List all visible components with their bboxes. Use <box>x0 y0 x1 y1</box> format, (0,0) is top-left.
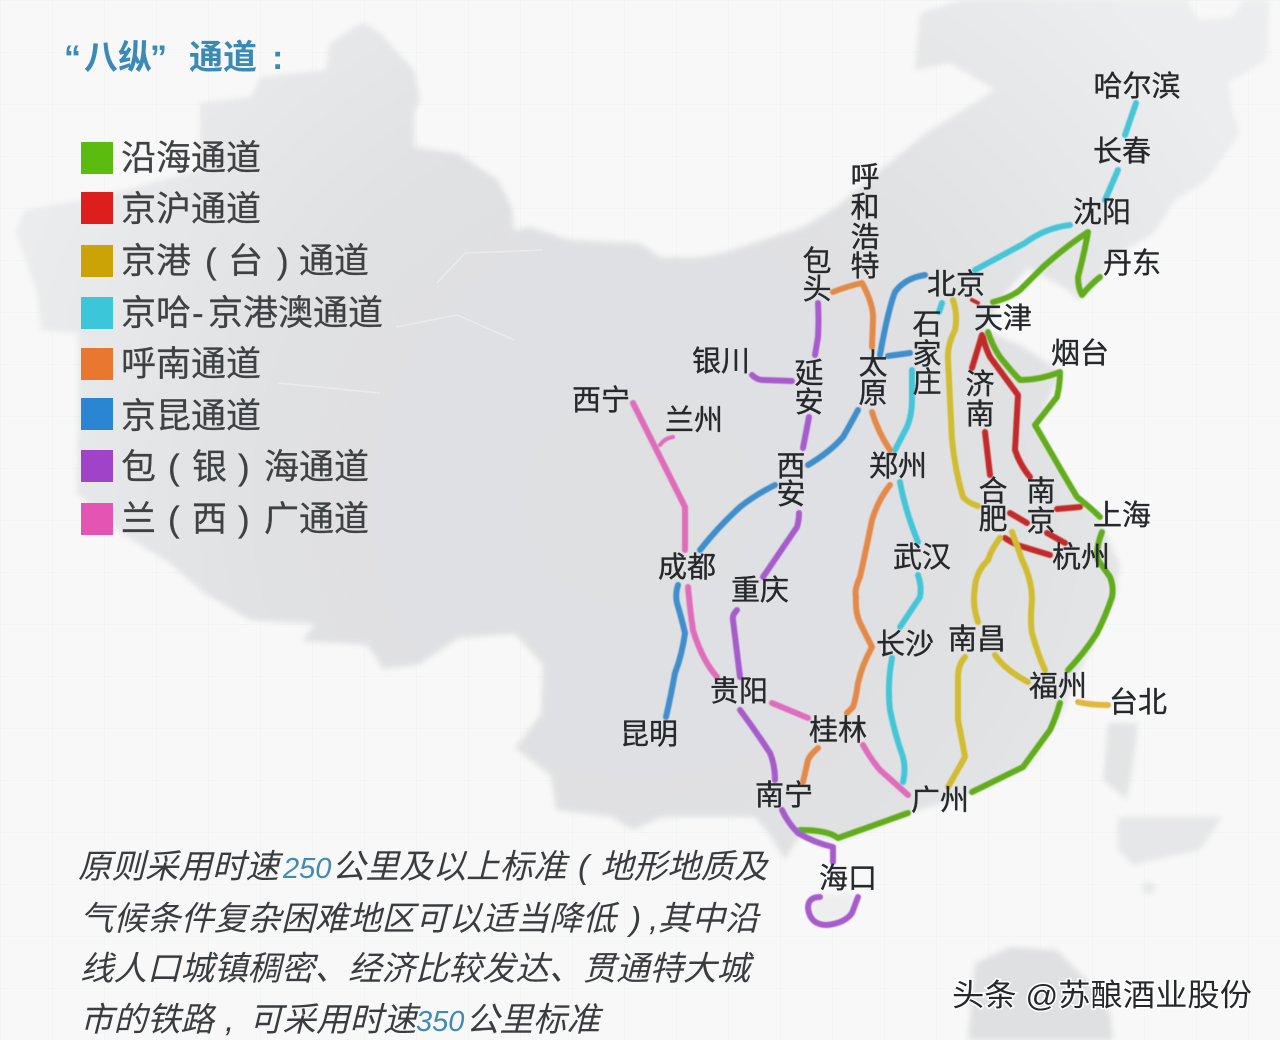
city: Hohhot: 和 <box>850 192 880 224</box>
city: Lanzhou: 兰州 <box>665 404 723 437</box>
city: Taipei: 台北 <box>1109 686 1167 719</box>
city: Hohhot: 呼 <box>850 162 880 194</box>
city: Guiyang: 贵阳 <box>710 675 768 708</box>
title: : <box>272 39 283 77</box>
city: Tianjin: 天津 <box>974 303 1032 335</box>
city: Nanning: 南宁 <box>755 779 813 812</box>
legend: Beijing-Hong Kong (Taiwan): ) <box>277 242 289 281</box>
city: Shanghai: 上海 <box>1093 499 1151 532</box>
legend: Beijing-Harbin: - <box>192 294 204 333</box>
city: Shijiazhuang: 庄 <box>912 366 942 399</box>
city: Xi'an: 安 <box>776 478 806 511</box>
legend: Lanzhou-Guangzhou: 广通道 <box>264 500 369 539</box>
city: Hangzhou: 杭州 <box>1052 541 1110 574</box>
legend: Beijing-Harbin <box>81 294 383 333</box>
city: Shijiazhuang: 家 <box>912 338 942 371</box>
legend: Hohhot-Nanning: 呼南通道 <box>121 345 261 384</box>
city: Fuzhou: 福州 <box>1029 670 1087 703</box>
legend: Beijing-Harbin: 京港澳通道 <box>208 294 383 333</box>
city: Shenyang: 沈阳 <box>1073 196 1131 229</box>
note text: , <box>649 901 658 938</box>
map: Hainan <box>808 892 855 925</box>
note text: 可采用时速 <box>249 1002 421 1039</box>
city: Guangzhou: 广州 <box>911 784 969 817</box>
legend: Baotou-Haikou <box>81 448 369 487</box>
city: Dandong: 丹东 <box>1103 247 1161 280</box>
note text: 地形地质及 <box>600 849 769 886</box>
city: Changchun: 长春 <box>1093 135 1151 168</box>
city: Zhengzhou: 郑州 <box>869 450 927 483</box>
city: Taiyuan: 太 <box>858 349 888 381</box>
route: Beijing-Hong Kong (Taiwan) <box>948 300 1108 787</box>
city: Xi'an: 西 <box>776 451 806 483</box>
city: Yantai: 烟台 <box>1051 337 1109 370</box>
legend: coastal: 沿海通道 <box>121 139 261 178</box>
note text: 原则采用时速 <box>78 849 283 886</box>
title: 通道 <box>189 39 257 77</box>
route: Baotou-Haikou <box>733 303 858 925</box>
city: Baotou: 头 <box>802 274 832 306</box>
legend: Beijing-Hong Kong (Taiwan): ( <box>205 242 217 281</box>
route: Hohhot-Nanning <box>803 283 890 782</box>
legend: Baotou-Haikou: ( <box>168 448 180 487</box>
city: Kunming: 昆明 <box>620 719 678 751</box>
legend: Baotou-Haikou: 包 <box>121 448 156 487</box>
legend: Beijing-Shanghai: 京沪通道 <box>121 190 261 229</box>
route: Beijing-Kunming <box>666 275 925 717</box>
legend: Beijing-Kunming: 京昆通道 <box>121 397 261 436</box>
city labels <box>572 70 1181 895</box>
city: Nanjing: 京 <box>1026 505 1056 538</box>
city: Chongqing: 重庆 <box>731 574 789 607</box>
title: 八纵 <box>84 39 152 77</box>
note text: 公里及以上标准 <box>332 849 570 886</box>
note text: 公里标准 <box>466 1002 603 1039</box>
city: Nanchang: 南昌 <box>948 623 1006 656</box>
title: “ <box>64 39 81 77</box>
city: Changsha: 长沙 <box>876 628 934 661</box>
route: coastal <box>800 232 1113 838</box>
route: Lanzhou-Guangzhou <box>633 403 908 795</box>
note text: ) <box>626 901 641 938</box>
city: Haikou: 海口 <box>819 862 877 895</box>
city: Hohhot: 特 <box>850 250 880 283</box>
city: Yan'an: 安 <box>794 386 824 419</box>
city: Beijing: 北京 <box>927 268 985 301</box>
city: Yan'an: 延 <box>794 358 824 390</box>
note text: 线人口城镇稠密、经济比较发达、贯通特大城 <box>80 951 754 988</box>
legend: Lanzhou-Guangzhou <box>81 500 369 539</box>
route: Beijing-Harbin <box>889 103 1136 782</box>
city: Jinan: 济 <box>965 369 995 401</box>
legend: Lanzhou-Guangzhou: ) <box>238 500 250 539</box>
railway routes <box>633 103 1136 925</box>
legend: Beijing-Hong Kong (Taiwan) <box>81 242 369 281</box>
legend: Lanzhou-Guangzhou: 西 <box>192 500 227 539</box>
note text: 市的铁路 <box>80 1002 216 1039</box>
city: Hohhot: 浩 <box>850 221 880 254</box>
map: islet <box>1142 883 1155 893</box>
city: Chengdu: 成都 <box>658 551 716 584</box>
city: Shijiazhuang: 石 <box>912 309 942 341</box>
city: Xining: 西宁 <box>572 384 630 417</box>
watermark: 头条 @苏酿酒业股份 <box>952 978 1252 1013</box>
map: island north of south sea <box>1118 817 1222 865</box>
legend: Lanzhou-Guangzhou: ( <box>168 500 180 539</box>
city: Taiyuan: 原 <box>858 378 888 410</box>
city: Guilin: 桂林 <box>809 714 867 747</box>
city: Jinan: 南 <box>965 398 995 431</box>
legend: Beijing-Hong Kong (Taiwan): 通道 <box>299 242 369 281</box>
title: ” <box>150 39 167 77</box>
route: Beijing-Shanghai <box>972 300 1080 555</box>
legend: Baotou-Haikou: 海通道 <box>264 448 369 487</box>
city: Baotou: 包 <box>802 246 832 278</box>
note text: 250 <box>282 853 331 885</box>
legend <box>81 139 383 539</box>
legend: Beijing-Hong Kong (Taiwan): 台 <box>228 242 263 281</box>
note text: ( <box>578 849 592 886</box>
note text <box>78 849 769 1039</box>
legend: Baotou-Haikou: 银 <box>192 448 227 487</box>
city: Hefei: 合 <box>978 476 1008 508</box>
legend: Lanzhou-Guangzhou: 兰 <box>121 500 156 539</box>
legend: Beijing-Hong Kong (Taiwan): 京港 <box>121 242 191 281</box>
city: Harbin: 哈尔滨 <box>1093 70 1181 103</box>
map: southern island <box>968 947 1113 1040</box>
city: Wuhan: 武汉 <box>893 542 951 574</box>
note text: 350 <box>416 1006 464 1038</box>
note text: 气候条件复杂困难地区可以适当降低 <box>80 901 619 938</box>
note text: 其中沿 <box>658 901 761 938</box>
legend: Beijing-Harbin: 京哈 <box>121 294 191 333</box>
note text: , <box>225 1002 234 1039</box>
legend: Baotou-Haikou: ) <box>238 448 250 487</box>
city: Nanjing: 南 <box>1026 476 1056 508</box>
city: Hefei: 肥 <box>978 504 1008 536</box>
city: Yinchuan: 银川 <box>692 345 750 378</box>
map: Taiwan <box>1103 723 1138 800</box>
